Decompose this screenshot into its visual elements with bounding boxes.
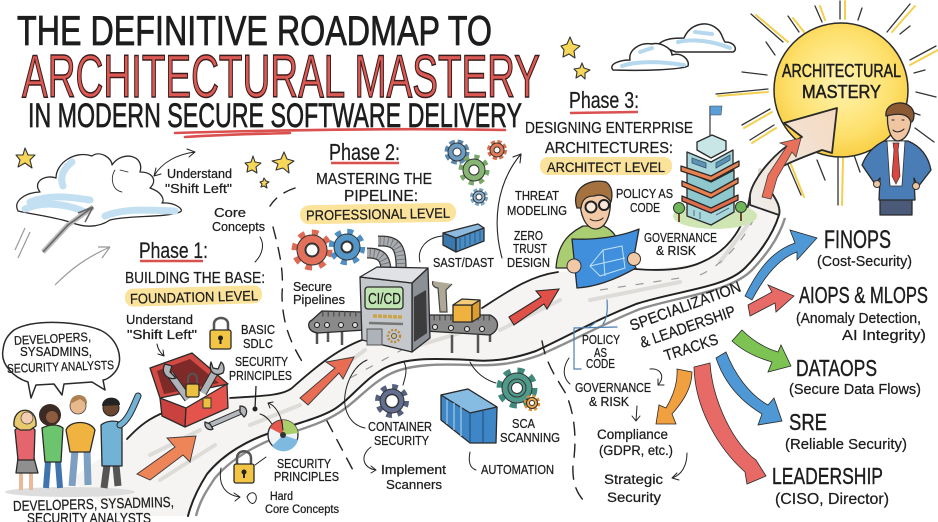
machine front bbox=[360, 277, 412, 352]
tower top bbox=[697, 135, 726, 158]
icon: red toolbox bbox=[150, 353, 228, 427]
hands bbox=[874, 180, 920, 190]
label: AIOps: (Anomaly Detection, bbox=[796, 310, 921, 327]
indicator lights bbox=[373, 316, 402, 317]
conveyor belt right bbox=[425, 315, 498, 353]
label: leadership: (CISO, Director) bbox=[775, 491, 889, 508]
icon: blue gear bbox=[332, 232, 362, 262]
label: governance and risk: & RISK bbox=[656, 243, 696, 258]
gear green bbox=[461, 157, 487, 183]
exhaust pipe ribs bbox=[367, 241, 401, 276]
label: DataOps bbox=[789, 355, 921, 398]
phase 1 heading bbox=[125, 238, 265, 307]
arrow: road red 3 bbox=[509, 289, 559, 325]
label: security principles lower: SECURITY bbox=[277, 456, 331, 471]
star bbox=[561, 37, 580, 58]
man pointing bbox=[101, 396, 138, 488]
slab 3 bbox=[682, 195, 738, 213]
label: implement scanners: Implement bbox=[381, 462, 446, 477]
icon: SAST container bbox=[443, 224, 484, 252]
label: lower governance bbox=[564, 358, 664, 421]
icon: policy clipboard bbox=[574, 300, 621, 371]
tower upper bbox=[687, 150, 733, 180]
label: basic SDLC: BASIC bbox=[241, 322, 275, 337]
box left face bbox=[160, 398, 186, 427]
gear small blue bbox=[472, 190, 486, 204]
icon: policy clipboard: AS bbox=[594, 346, 607, 360]
label: SRE: (Reliable Security) bbox=[785, 436, 907, 453]
icon: padlock top bbox=[210, 318, 231, 349]
parcel bbox=[453, 299, 480, 322]
icon: padlock lower bbox=[234, 451, 254, 483]
cloud shading bbox=[25, 162, 175, 216]
exhaust pipes bbox=[367, 241, 401, 276]
label: specialization tracks bbox=[628, 279, 743, 365]
label: core concepts: Concepts bbox=[212, 219, 265, 234]
blueprint bbox=[572, 229, 639, 288]
track arrows bbox=[656, 230, 817, 484]
label: hard core concepts: Hard bbox=[270, 491, 293, 503]
man yellow sweater bbox=[66, 395, 95, 486]
cloud swirl bbox=[112, 170, 128, 192]
speech bubble: SYSADMINS, bbox=[20, 345, 92, 359]
road centre dashes bbox=[350, 190, 763, 378]
shirt bbox=[887, 141, 905, 186]
label: understand shift left top: "Shift Left" bbox=[165, 181, 232, 196]
arrow: leadership bbox=[694, 363, 766, 484]
label: understand shift left top: Understand bbox=[167, 166, 232, 181]
tower lower bbox=[687, 170, 734, 211]
arrow: inner salmon bbox=[762, 138, 801, 199]
small arrows around disc bbox=[255, 402, 283, 465]
phase 1 heading: FOUNDATION LEVEL bbox=[130, 287, 258, 307]
phase 2 heading: PROFESSIONAL LEVEL bbox=[306, 205, 450, 223]
phase 3 heading: DESIGNING ENTERPRISE bbox=[525, 120, 693, 137]
road lower edge bbox=[188, 182, 779, 516]
robot arm bbox=[433, 281, 452, 312]
label: zero trust design: ZERO bbox=[514, 228, 543, 243]
arrow: aiops bbox=[748, 285, 794, 316]
sun bbox=[774, 23, 908, 157]
label: AIOps: AI Integrity) bbox=[842, 327, 926, 344]
label: zero trust design: TRUST bbox=[513, 241, 547, 256]
machine small gear bbox=[388, 330, 400, 342]
icon: wrench bbox=[205, 406, 247, 430]
blueprint plan bbox=[590, 246, 625, 276]
road streaks bbox=[150, 170, 760, 480]
cloud right back bbox=[658, 24, 735, 52]
label: architectural mastery bbox=[782, 61, 901, 102]
label: architectural mastery: MASTERY bbox=[802, 82, 881, 102]
label: understand shift left top bbox=[154, 149, 232, 196]
label: policy as code: CODE bbox=[630, 200, 660, 215]
ground shadow bbox=[5, 487, 135, 497]
label: governance and risk: GOVERNANCE bbox=[644, 230, 717, 245]
wrench right bbox=[203, 362, 224, 393]
machine keypad bbox=[367, 329, 382, 345]
label: leadership bbox=[772, 463, 889, 508]
cloud right shading bbox=[622, 32, 730, 66]
icon: shipping container bbox=[441, 389, 497, 443]
label: security principles upper: PRINCIPLES bbox=[229, 368, 292, 383]
label: understand shift left bbox=[126, 312, 197, 356]
label: basic SDLC: SDLC bbox=[243, 336, 273, 351]
label: FinOps bbox=[817, 226, 912, 270]
machine side bbox=[412, 268, 430, 352]
label: governance and risk bbox=[644, 230, 717, 258]
status bar bbox=[369, 323, 403, 324]
label: lower governance: & RISK bbox=[589, 395, 630, 409]
phase 1 heading: Phase 1: bbox=[139, 238, 208, 263]
label: DataOps: (Secure Data Flows) bbox=[789, 381, 921, 398]
phase 3 heading: ARCHITECTURES: bbox=[545, 140, 673, 157]
hair bbox=[886, 103, 914, 122]
star bbox=[574, 63, 590, 79]
phase 2 heading: PIPELINE: bbox=[344, 188, 418, 205]
smile bbox=[590, 218, 603, 221]
label: implement scanners: Scanners bbox=[386, 477, 443, 492]
phase divider 2 bbox=[542, 341, 586, 503]
label: FinOps: (Cost-Security) bbox=[817, 253, 912, 270]
icon: green gear with small orange gear bbox=[500, 371, 538, 410]
road lower edge shadow bbox=[196, 218, 785, 516]
label: threat modeling: THREAT bbox=[515, 188, 559, 203]
title underline bbox=[175, 129, 505, 137]
arrow: road head to mastery bbox=[750, 108, 837, 215]
label: audience caption bbox=[13, 495, 174, 522]
face features bbox=[892, 120, 904, 132]
ground floor bbox=[687, 200, 734, 225]
arrow: up to phase 3 bbox=[497, 154, 521, 258]
label: AIOps bbox=[796, 282, 928, 344]
label: security principles upper: SECURITY bbox=[235, 354, 288, 369]
label: container security bbox=[345, 360, 432, 448]
road bbox=[70, 137, 822, 516]
label: specialization tracks: & LEADERSHIP bbox=[638, 303, 738, 352]
label: hard core concepts bbox=[220, 468, 339, 516]
woman blonde bbox=[14, 410, 38, 490]
road upper edge bbox=[127, 137, 802, 439]
icon: floating gears bbox=[447, 142, 505, 204]
wrench left bbox=[163, 364, 188, 399]
label: basic SDLC bbox=[241, 322, 275, 351]
arrow: dataops bbox=[732, 330, 791, 372]
icon: policy clipboard: CODE bbox=[586, 357, 615, 371]
label: SCA scanning bbox=[470, 362, 560, 445]
label: specialization tracks: SPECIALIZATION bbox=[628, 279, 743, 335]
phase 2 heading: Phase 2: bbox=[329, 139, 400, 165]
label: secure pipelines: Secure bbox=[293, 279, 332, 294]
glasses bbox=[586, 200, 609, 212]
label: container security: CONTAINER bbox=[368, 419, 432, 434]
woman curly hair bbox=[39, 404, 63, 488]
cloud right front bbox=[612, 44, 688, 70]
title line 2: ARCHITECTURAL MASTERY bbox=[22, 43, 540, 110]
gear blue-grey bbox=[447, 142, 467, 162]
hair bbox=[576, 181, 612, 208]
label: lower governance: GOVERNANCE bbox=[575, 381, 651, 395]
label: audience caption: DEVELOPERS, SYSADMINS, bbox=[13, 495, 174, 515]
flag bbox=[710, 106, 722, 136]
windows bbox=[692, 155, 730, 219]
phase divider 1 bbox=[270, 188, 355, 474]
phase 1 heading: BUILDING THE BASE: bbox=[125, 270, 265, 287]
box clasp bbox=[203, 398, 211, 408]
label: understand shift left: Understand bbox=[126, 312, 193, 327]
legs bbox=[880, 196, 912, 215]
title line 3: IN MODERN SECURE SOFTWARE DELIVERY bbox=[28, 97, 522, 135]
label: core concepts: Core bbox=[214, 205, 246, 220]
label: architectural mastery: ARCHITECTURAL bbox=[782, 61, 901, 81]
pin marker bbox=[252, 386, 258, 412]
label: security principles upper bbox=[229, 354, 292, 383]
icon: slate gear bbox=[378, 362, 406, 415]
speech bubble bbox=[3, 322, 120, 398]
sun rays bbox=[716, 1, 938, 205]
machine top bbox=[360, 267, 428, 283]
star bbox=[272, 152, 294, 173]
star bbox=[260, 178, 269, 188]
label: SAST/DAST: SAST/DAST bbox=[433, 256, 494, 270]
label: SAST/DAST bbox=[419, 236, 494, 270]
head bbox=[887, 109, 911, 141]
jacket bbox=[862, 141, 931, 200]
label: automation: AUTOMATION bbox=[481, 462, 554, 477]
phase 2 heading: MASTERING THE bbox=[316, 171, 432, 188]
arrow: compliance orange bbox=[656, 369, 692, 424]
label: automation bbox=[469, 452, 554, 477]
label: compliance bbox=[597, 427, 673, 458]
star bbox=[16, 148, 35, 168]
face bbox=[580, 193, 610, 229]
gear orange bbox=[489, 142, 505, 158]
label: implement scanners bbox=[364, 447, 446, 492]
open lid bbox=[150, 353, 228, 398]
label: compliance: Compliance bbox=[597, 427, 668, 442]
hands bbox=[567, 252, 640, 273]
icon: red gear bbox=[295, 233, 329, 267]
icon: CI/CD machine and conveyor bbox=[309, 241, 498, 353]
bubble text: DEVELOPERS, bbox=[14, 330, 91, 348]
star bbox=[245, 156, 261, 173]
icon: man in suit bbox=[862, 103, 931, 215]
phase 3 heading: ARCHITECT LEVEL bbox=[547, 159, 665, 175]
label: core concepts bbox=[212, 205, 265, 262]
label: leadership: LEADERSHIP bbox=[772, 463, 883, 489]
label: compliance: (GDPR, etc.) bbox=[599, 443, 673, 458]
lid interior bbox=[157, 359, 219, 394]
label: zero trust design: DESIGN bbox=[507, 255, 550, 270]
slab 1 bbox=[681, 161, 739, 181]
label: SRE: SRE bbox=[789, 409, 827, 435]
body bbox=[556, 226, 620, 268]
label: DataOps: DATAOPS bbox=[796, 355, 877, 381]
phase 3 heading bbox=[525, 87, 693, 175]
CI/CD screen bbox=[365, 287, 403, 309]
machine vent bbox=[414, 290, 427, 342]
label: threat modeling: MODELING bbox=[507, 203, 567, 218]
label: strategic security bbox=[604, 453, 687, 505]
stars bbox=[16, 37, 590, 188]
arrow: SRE bbox=[716, 352, 782, 425]
label: strategic security: Strategic bbox=[604, 472, 663, 487]
label: security principles lower: PRINCIPLES bbox=[274, 469, 339, 484]
icon: disc bbox=[268, 420, 298, 451]
label: security principles lower bbox=[274, 456, 339, 484]
exhaust pipes inner bbox=[367, 241, 401, 276]
phase 2 heading bbox=[300, 139, 456, 224]
label: FinOps: FINOPS bbox=[824, 226, 891, 254]
box front face bbox=[185, 384, 228, 427]
label: SCA scanning: SCANNING bbox=[500, 430, 560, 445]
label: secure pipelines: Pipelines bbox=[293, 292, 345, 307]
arrow: road orange 1 bbox=[137, 436, 196, 480]
arrow: finops bbox=[745, 230, 817, 300]
CI/CD screen: CI/CD bbox=[368, 291, 401, 308]
icon: policy clipboard: POLICY bbox=[582, 333, 621, 347]
label: understand shift left: "Shift Left" bbox=[127, 327, 197, 342]
arrow: road red 2 bbox=[300, 357, 354, 405]
label: container security: SECURITY bbox=[374, 433, 429, 448]
label: SRE bbox=[785, 409, 907, 453]
label: specialization tracks: TRACKS bbox=[662, 331, 720, 365]
title bbox=[17, 7, 540, 137]
label: hard core concepts: Core Concepts bbox=[265, 504, 339, 516]
people group bbox=[5, 395, 138, 497]
slab 2 bbox=[682, 178, 738, 198]
label: threat modeling bbox=[507, 188, 567, 218]
cloud trail arrows bbox=[15, 207, 110, 285]
speech bubble: SECURITY ANALYSTS bbox=[7, 358, 114, 376]
icon: building bbox=[673, 106, 757, 229]
label: policy as code: POLICY AS bbox=[616, 186, 673, 201]
label: strategic security: Security bbox=[607, 490, 661, 505]
label: secure pipelines bbox=[293, 279, 345, 307]
conveyor belt left bbox=[309, 311, 365, 345]
phase 3 heading: Phase 3: bbox=[569, 87, 639, 113]
label: policy as code bbox=[616, 186, 673, 215]
cloud left bbox=[17, 154, 181, 226]
title line 1: THE DEFINITIVE ROADMAP TO bbox=[17, 7, 492, 54]
tie bbox=[892, 143, 900, 184]
label: zero trust design bbox=[507, 228, 550, 270]
grass bbox=[673, 203, 757, 229]
icon: architect with blueprint bbox=[556, 181, 640, 288]
trees bbox=[674, 202, 746, 222]
lock in box bbox=[186, 374, 199, 397]
label: SCA scanning: SCA bbox=[512, 416, 535, 431]
